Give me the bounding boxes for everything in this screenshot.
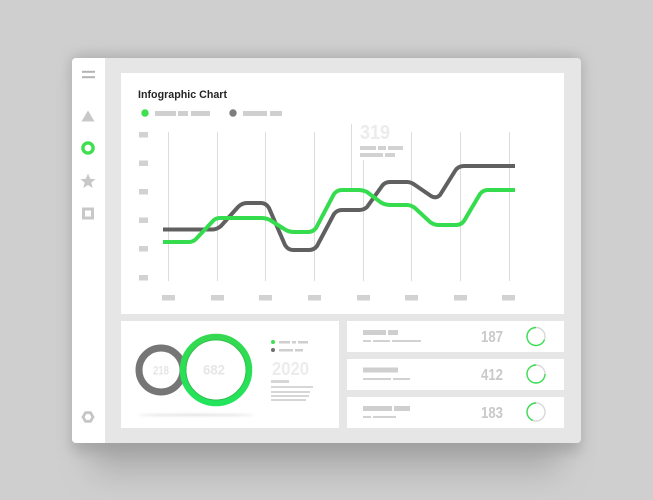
icon: active ring: [83, 143, 93, 153]
callout: 319: [360, 122, 403, 157]
icon: settings hexagon: [83, 413, 93, 421]
donut: green 682: 682: [203, 362, 225, 378]
legend: [141, 109, 282, 117]
chart grid lines: [168, 124, 510, 281]
icon: menu: [82, 71, 95, 78]
icon: square: [82, 208, 94, 220]
title: Infographic Chart: [138, 89, 227, 101]
progress ring: [527, 365, 545, 383]
panel: stat row 412: [347, 359, 564, 390]
panel: stat row 412: 412: [481, 367, 503, 384]
icon: star: [80, 174, 96, 188]
year 2020 text block: 2020: [272, 359, 309, 379]
donut: gray 218: [139, 348, 183, 392]
panel: stat row 187: [347, 321, 564, 352]
panel: stat row 187: 187: [481, 329, 503, 346]
donut: gray 218: 218: [153, 364, 169, 378]
callout: 319: 319: [360, 122, 390, 144]
y axis labels: [139, 132, 148, 280]
donut legend: [271, 340, 308, 352]
dashboard card: [72, 58, 581, 443]
year 2020 text block: [271, 359, 313, 401]
sidebar: [72, 58, 105, 443]
panel: stat row 183: 183: [481, 405, 503, 422]
panel: donut charts: [121, 321, 339, 428]
panel: stat row 183: [347, 397, 564, 428]
progress ring: [524, 325, 548, 348]
icon: triangle: [82, 110, 94, 122]
donut: green 682: [183, 337, 249, 403]
donut shadow: [138, 414, 254, 416]
x axis labels: [162, 295, 515, 300]
progress ring: [524, 400, 548, 424]
line: dark series: [163, 166, 515, 250]
line: green series: [163, 190, 515, 242]
panel: line chart: [121, 73, 564, 314]
